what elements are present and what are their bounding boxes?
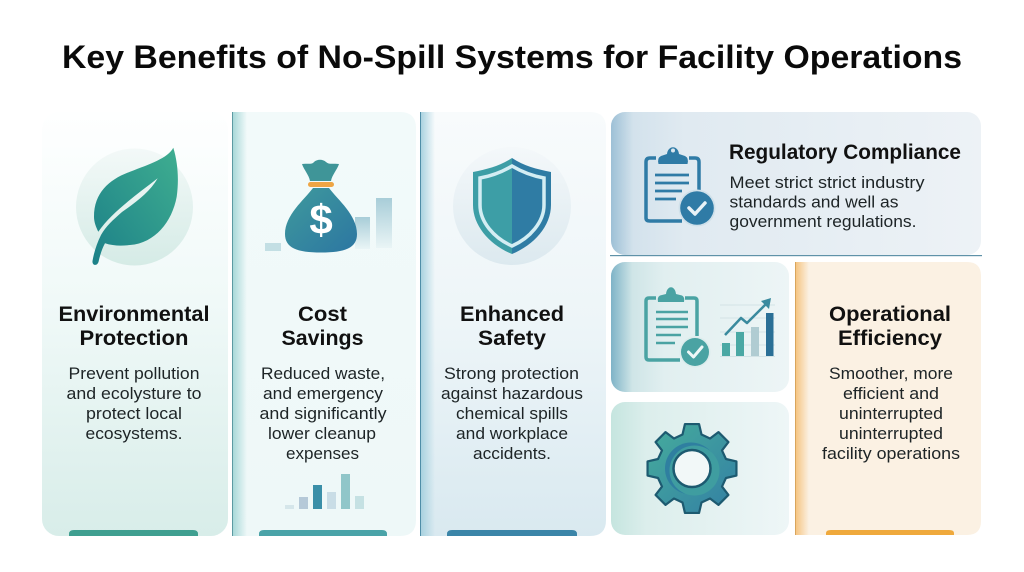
- text block: and significantly: [260, 404, 387, 423]
- title: Key Benefits of No-Spill Systems for Facility Operations: [62, 39, 962, 75]
- text block: protect local: [86, 404, 182, 423]
- panel: gear icon: [611, 402, 789, 535]
- text block: efficient and: [843, 384, 939, 403]
- heading: [829, 302, 951, 350]
- heading: [58, 302, 210, 350]
- icon: gear: [648, 424, 736, 513]
- text block: [730, 173, 925, 231]
- icon: clipboard with check: [646, 147, 716, 226]
- text block: uninterrupted: [839, 424, 943, 443]
- panel: compliance and growth icons: [611, 262, 789, 392]
- text block: facility operations: [822, 444, 960, 463]
- text block: [66, 364, 202, 443]
- mini bar chart: [285, 474, 364, 509]
- icon: leaf: [76, 148, 193, 266]
- text block: Smoother, more: [829, 364, 953, 383]
- text block: [441, 364, 583, 463]
- text block: and ecolysture to: [66, 384, 202, 403]
- text block: uninterrupted: [839, 404, 943, 423]
- icon: shield: [453, 147, 571, 265]
- accent tab: [259, 530, 387, 536]
- icon: money bag with bars: $: [309, 196, 333, 243]
- heading: Cost: [298, 302, 347, 326]
- panel: environmental protection: [42, 112, 228, 536]
- text block: Strong protection: [444, 364, 579, 383]
- text block: [260, 364, 387, 463]
- heading: Enhanced: [460, 302, 564, 326]
- text block: Reduced waste,: [261, 364, 385, 383]
- text block: Prevent pollution: [68, 364, 200, 383]
- panel: operational efficiency: [795, 262, 981, 535]
- icon: clipboard: [646, 287, 710, 368]
- text block: expenses: [286, 444, 359, 463]
- text block: accidents.: [473, 444, 551, 463]
- heading: Protection: [80, 326, 188, 350]
- text block: lower cleanup: [268, 424, 376, 443]
- heading: [460, 302, 564, 350]
- text block: against hazardous: [441, 384, 583, 403]
- icon: growth chart: [720, 298, 775, 356]
- panel: regulatory compliance: [610, 112, 982, 256]
- heading: [282, 302, 364, 350]
- heading: Regulatory Compliance: [729, 141, 961, 164]
- heading: Operational: [829, 302, 951, 326]
- text block: [822, 364, 960, 463]
- text block: ecosystems.: [86, 424, 182, 443]
- accent tab: [826, 530, 954, 535]
- text block: standards and well as: [730, 192, 898, 212]
- text block: and emergency: [263, 384, 384, 403]
- heading: Safety: [478, 326, 546, 350]
- heading: Efficiency: [838, 326, 942, 350]
- heading: Environmental: [58, 302, 210, 326]
- accent tab: [447, 530, 577, 536]
- text block: and workplace: [456, 424, 568, 443]
- text block: government regulations.: [730, 212, 916, 231]
- heading: Savings: [282, 326, 364, 350]
- icon: money bag with bars: [265, 160, 392, 252]
- text block: Meet strict strict industry: [730, 173, 925, 192]
- panel: cost savings: [232, 112, 416, 536]
- text block: chemical spills: [456, 404, 568, 423]
- panel: enhanced safety: [420, 112, 606, 536]
- accent tab: [69, 530, 198, 536]
